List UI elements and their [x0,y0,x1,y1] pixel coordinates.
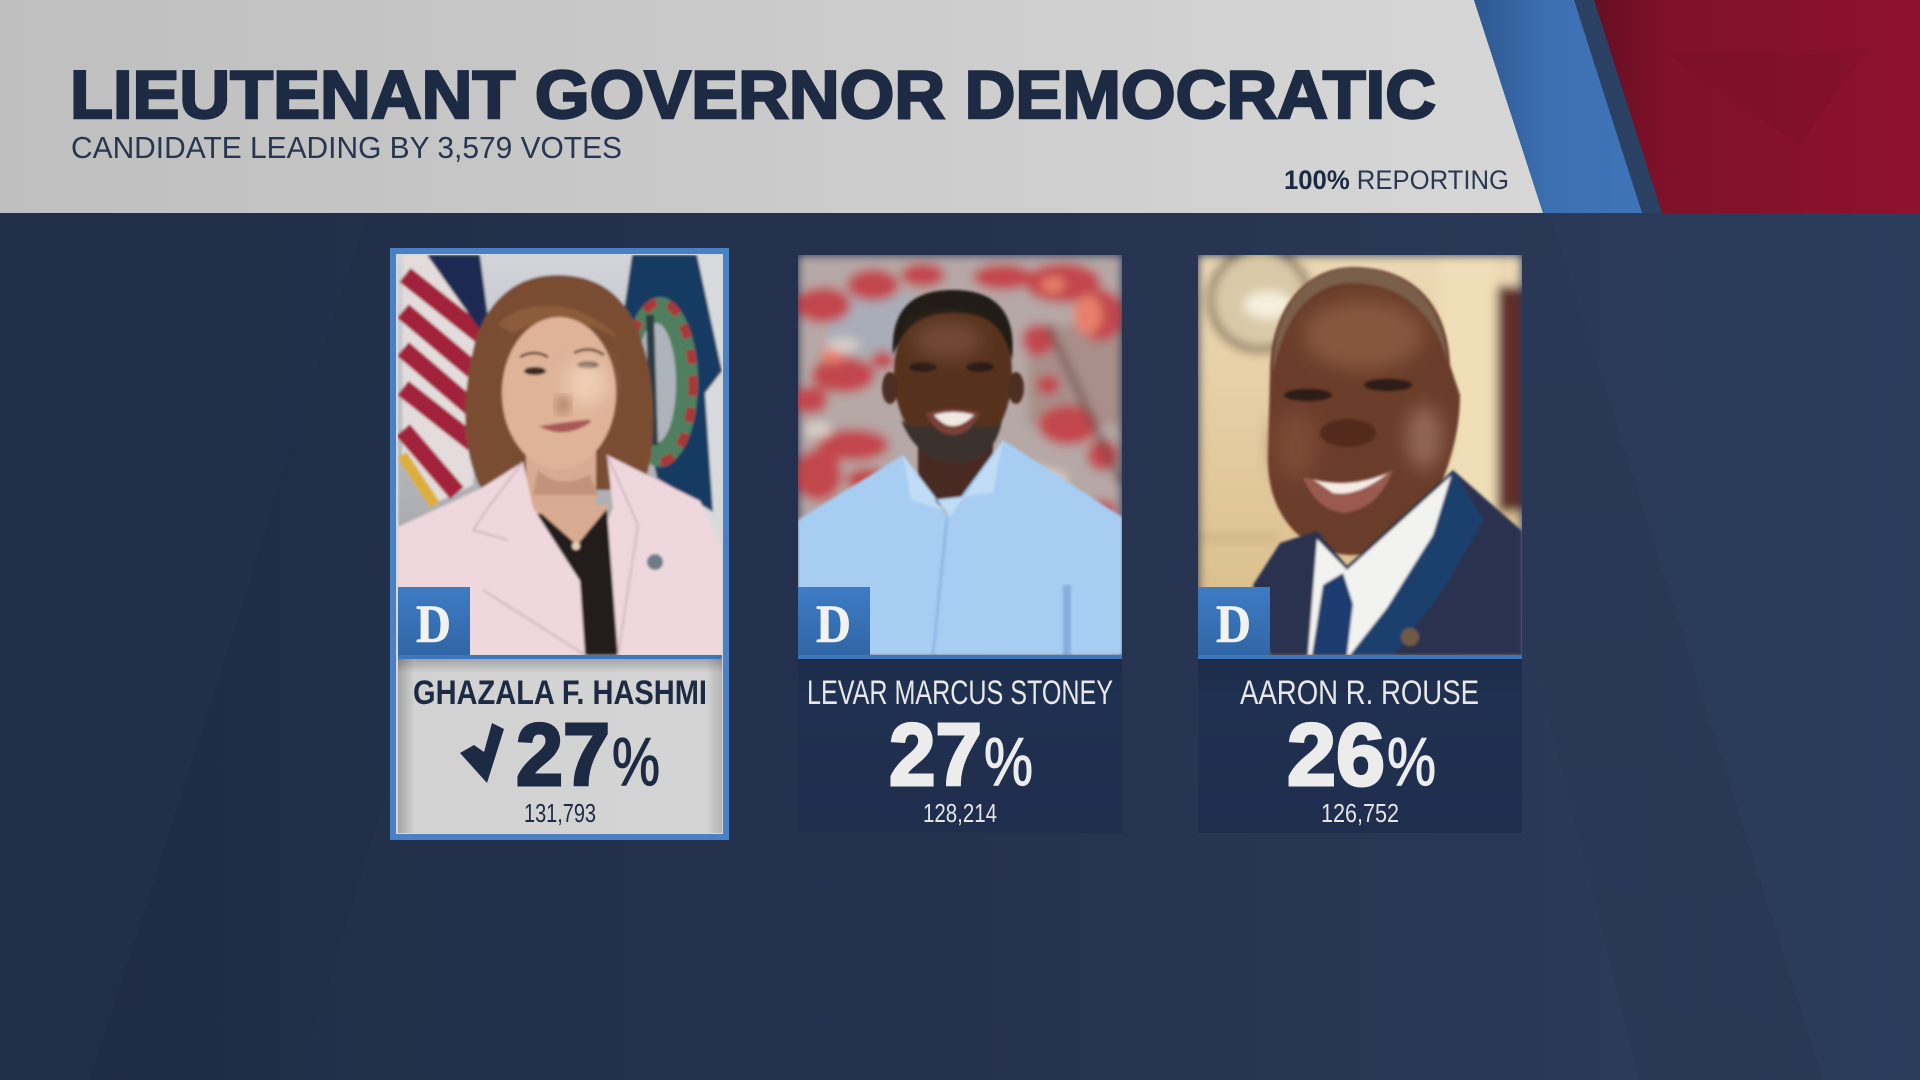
party badge: D [1198,587,1270,655]
photo: Ghazala F. Hashmi [398,255,722,655]
winner highlight frame [390,248,729,840]
header light panel [0,0,1543,213]
vote percentage: 27 [516,705,610,804]
vote percentage: 26 [1287,705,1385,804]
percent sign: % [1387,724,1436,800]
vote count: 126,752 [1321,798,1399,828]
candidate name: AARON R. ROUSE [1240,674,1479,712]
header blue stripe [1474,0,1642,213]
candidate card: Aaron R. Rouse [1198,250,1522,833]
party badge: D: D [1216,594,1251,654]
subtitle: CANDIDATE LEADING BY 3,579 VOTES [71,130,622,165]
party badge: D: D [416,594,451,654]
candidate card: Levar Marcus Stoney [792,255,1124,833]
vote count: 128,214 [923,798,997,828]
reporting status: 100% REPORTING [1284,165,1509,195]
party badge: D [398,587,470,655]
vote percentage: 27 [889,705,982,804]
info panel: Hashmi [398,655,722,833]
candidate name: LEVAR MARCUS STONEY [807,674,1113,712]
candidate card: Ghazala F. Hashmi (winner highlight) [390,248,729,840]
header red panel [1594,0,1920,213]
percent sign: % [984,724,1033,800]
party badge: D [798,587,870,655]
header dark stripe [1574,0,1662,213]
info panel: Stoney [798,655,1122,833]
party badge: D: D [816,594,851,654]
candidate name: GHAZALA F. HASHMI [413,674,707,712]
percent sign: % [612,724,660,800]
vote count: 131,793 [524,798,596,828]
title: LIEUTENANT GOVERNOR DEMOCRATIC [70,57,1436,133]
info panel: Rouse [1198,655,1522,833]
photo: Levar Marcus Stoney [792,255,1124,655]
header banner [0,0,1920,213]
icon: winner check mark [460,723,504,783]
photo: Aaron R. Rouse [1198,250,1522,655]
